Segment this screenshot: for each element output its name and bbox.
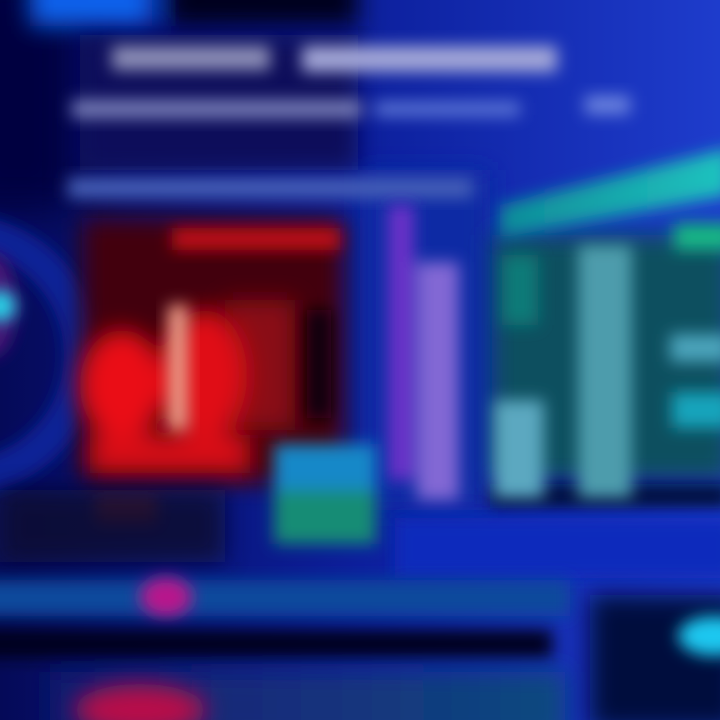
pink marker <box>140 577 192 617</box>
panel: teal <box>490 148 720 508</box>
header: top accents <box>30 0 358 26</box>
teal header band <box>500 148 720 238</box>
dark area below red panel <box>0 490 225 562</box>
green bar <box>674 224 720 250</box>
bottom strip <box>0 577 570 617</box>
red panel caption <box>95 500 157 524</box>
footer red blob <box>74 684 206 720</box>
subtitle text (illegible in reference) <box>72 96 630 118</box>
panel: purple columns <box>388 205 459 500</box>
red panel heading <box>172 228 340 250</box>
red mottling <box>225 300 295 430</box>
panel: red <box>80 218 344 524</box>
red panel dark bar <box>307 310 331 418</box>
red chart highlight bar <box>168 305 188 430</box>
title text (illegible in reference) <box>112 46 557 72</box>
teal column short <box>494 400 544 498</box>
intro line <box>68 178 473 198</box>
panel: blue lower right <box>395 518 720 578</box>
header: dark backing panel <box>80 35 358 170</box>
cyan bar <box>672 392 720 428</box>
red chart lobes <box>80 310 250 473</box>
teal column tall <box>578 245 632 498</box>
left ring gauge <box>0 233 82 477</box>
light bar <box>670 334 720 362</box>
footer <box>50 672 565 720</box>
base shadow <box>490 484 720 508</box>
small card <box>274 444 376 544</box>
cyan glow <box>678 616 720 656</box>
teal column dark <box>502 255 538 325</box>
black strip <box>0 630 552 658</box>
bottom right dark panel <box>590 595 720 720</box>
